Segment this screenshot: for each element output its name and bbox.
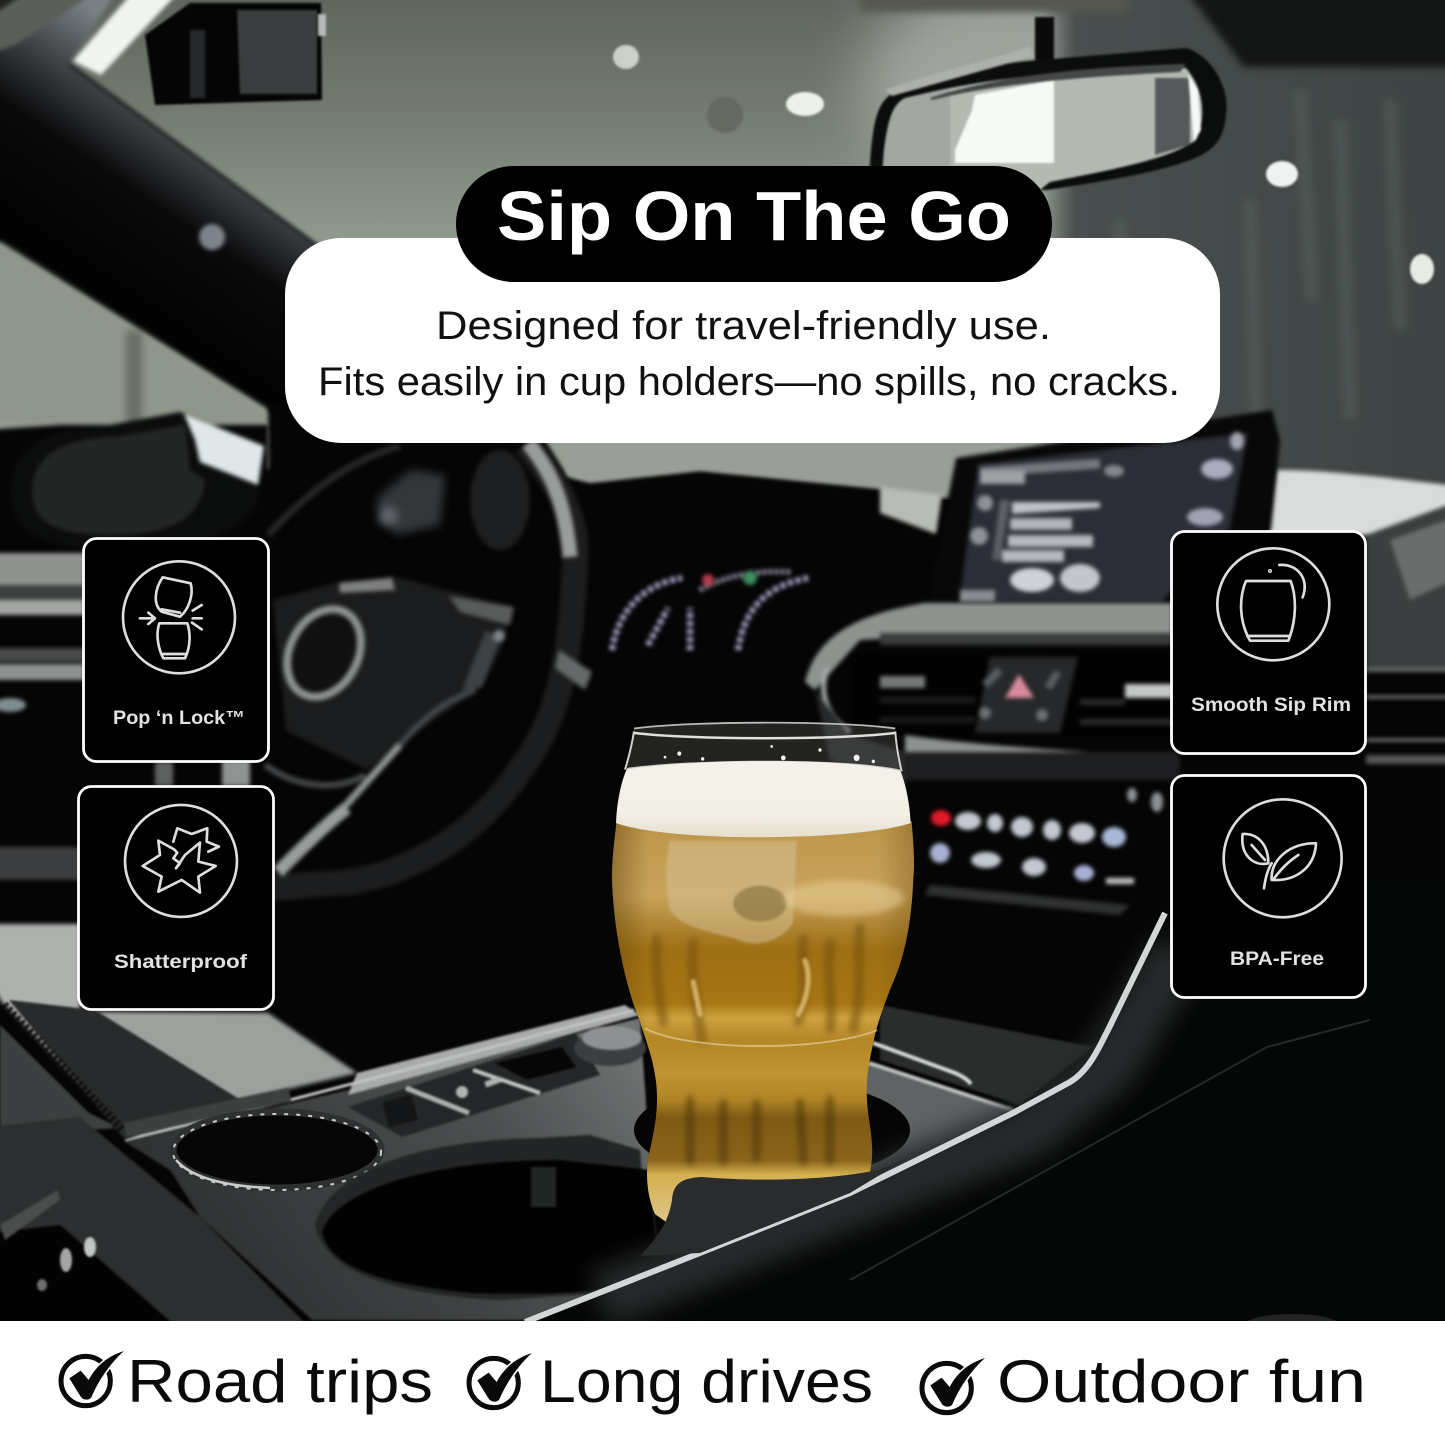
top left mirror box: [145, 3, 326, 105]
small cup ring: [173, 1112, 381, 1190]
card: BPA-Free: [1172, 776, 1366, 998]
title: Sip On The Go: [497, 177, 1011, 255]
curved leather dash: [0, 1117, 312, 1330]
checklist: Outdoor fun: [922, 1348, 1366, 1415]
cup holder divider: [640, 1158, 908, 1256]
water droplets: [613, 45, 1434, 284]
label: Pop ‘n Lock™: [113, 708, 245, 729]
description text: Fits easily in cup holders—no spills, no cracks.: [318, 360, 1180, 404]
icon: check: [469, 1353, 532, 1408]
title pill: [456, 166, 1052, 282]
glass cup holder hole: [634, 1080, 910, 1180]
leather left panels: [0, 1025, 120, 1135]
text: Long drives: [540, 1348, 873, 1415]
ice cube highlight: [666, 841, 797, 943]
console silver edge: [525, 913, 1165, 1322]
icon: check: [61, 1351, 124, 1406]
label: Smooth Sip Rim: [1191, 695, 1351, 716]
text: Outdoor fun: [997, 1348, 1366, 1415]
label: BPA-Free: [1230, 949, 1324, 970]
button strip: [348, 1033, 600, 1137]
icon: tumbler with rim arc: [1217, 548, 1329, 660]
bottom white band: [0, 1321, 1445, 1445]
center screen: [927, 410, 1280, 602]
checklist: Road trips: [61, 1348, 433, 1415]
steering wheel: [155, 443, 592, 888]
side window lower shading: [0, 243, 268, 450]
door and left side panels: [0, 553, 357, 1125]
foreground panel: [505, 880, 1445, 1330]
control buttons: [925, 788, 1163, 915]
glass rim and upper wall: [625, 723, 902, 771]
foreground sheen: [600, 950, 1180, 1300]
console surface and lower dash: [0, 1000, 660, 1330]
description text: Designed for travel-friendly use.: [436, 304, 1051, 348]
a-pillar: [0, 0, 360, 470]
icon: check: [922, 1358, 985, 1413]
callout panel: description: [285, 238, 1220, 443]
icon: leaves: [1224, 799, 1342, 917]
rearview mirror: [868, 17, 1227, 190]
icon: shatter burst: [125, 805, 237, 917]
right of glass surfaces: [840, 1005, 1093, 1195]
card: Smooth Sip Rim: [1172, 532, 1366, 754]
windshield and side window: [0, 0, 1445, 500]
large cup holder: [315, 1135, 660, 1300]
card: Pop 'n Lock: [84, 538, 268, 762]
gear knob: [574, 1030, 646, 1066]
dash hood under the panel: [268, 404, 960, 640]
beer glass: [612, 723, 914, 1225]
center console vents and controls: [805, 603, 1180, 790]
foam: [616, 761, 911, 837]
label: Shatterproof: [114, 952, 248, 973]
instrument gauge: [612, 571, 808, 650]
text: Road trips: [127, 1348, 433, 1415]
dashboard top band and screen surround: [567, 443, 1445, 764]
checklist: Long drives: [469, 1348, 873, 1415]
glass body with beer: [612, 821, 914, 1225]
icon: glasses locking: [123, 561, 235, 673]
glass ridge: [645, 1028, 877, 1046]
console top band: [348, 1005, 640, 1095]
matte console: [125, 1018, 660, 1320]
side mirror: [0, 412, 300, 560]
card: Shatterproof: [78, 786, 274, 1010]
condensation streaks: [656, 928, 860, 1161]
